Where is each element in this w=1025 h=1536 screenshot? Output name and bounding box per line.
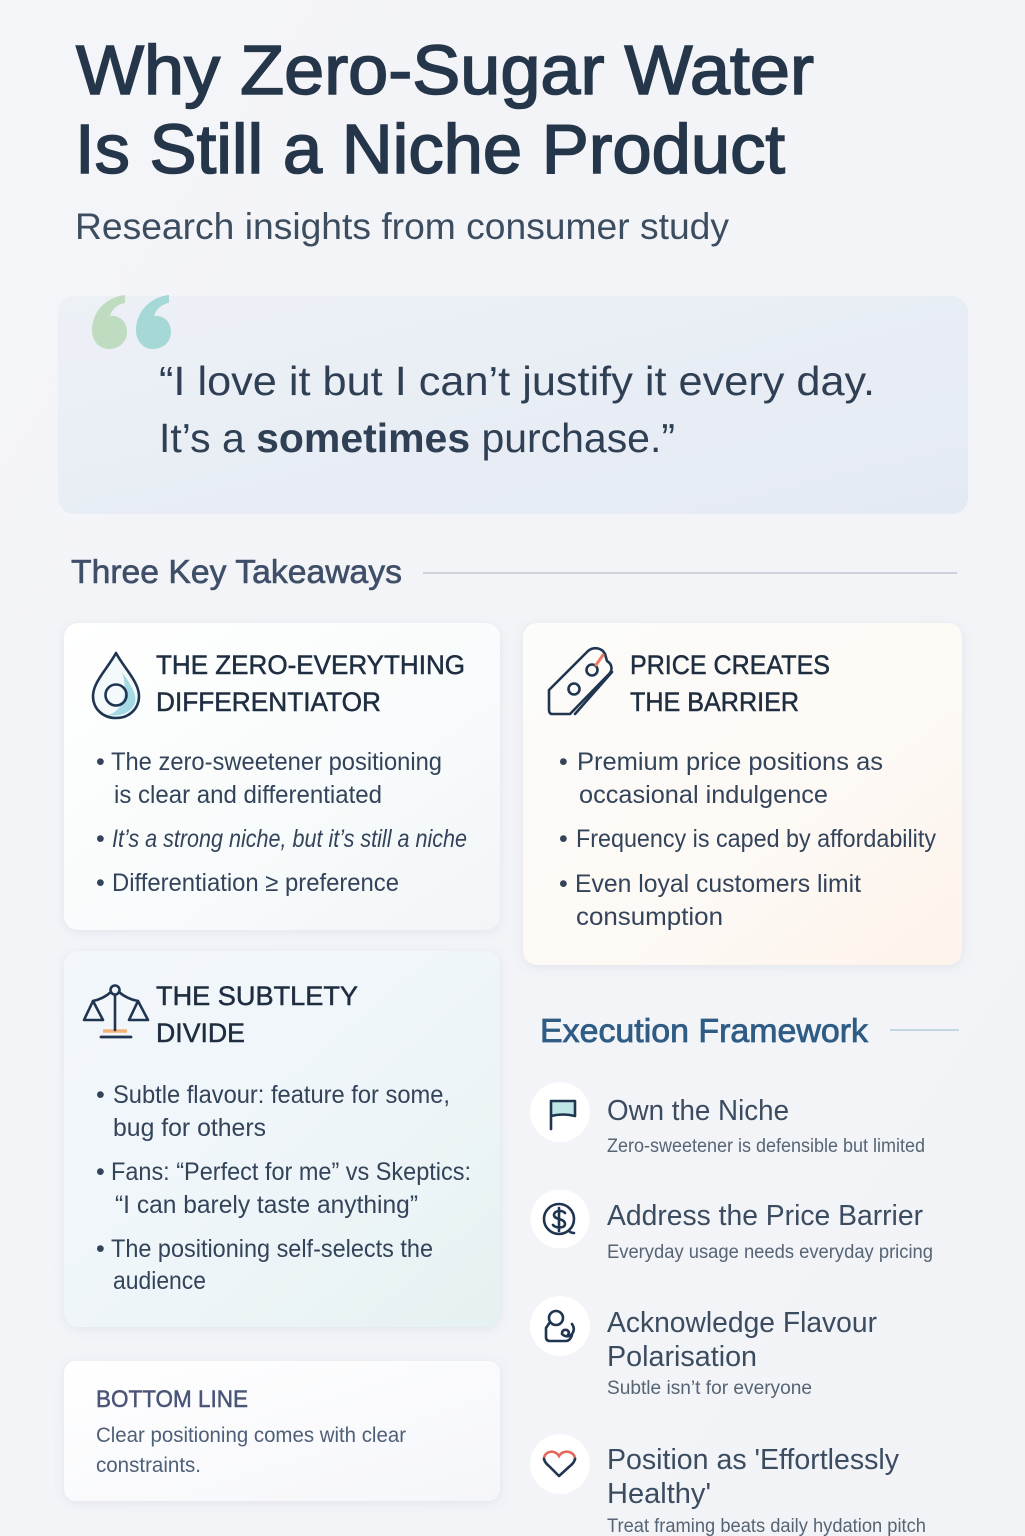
item title: Healthy': [607, 1478, 711, 1510]
panel: zero-everything differentiator: [64, 623, 500, 930]
item: acknowledge flavour polarisation: [530, 1296, 877, 1399]
card heading: THE BARRIER: [630, 687, 799, 717]
panel: quote: [58, 295, 968, 514]
title: Why Zero-Sugar Water: [76, 31, 814, 109]
bullet list: [96, 748, 467, 897]
bullet list: •: [96, 869, 105, 897]
bullet list: The positioning self-selects the: [111, 1235, 433, 1263]
bullet list: Even loyal customers limit: [575, 870, 861, 898]
item title: Polarisation: [607, 1341, 757, 1373]
heading: three key takeaways: Three Key Takeaways: [71, 553, 402, 590]
bullet list: “I can barely taste anything”: [115, 1191, 418, 1219]
panel: price creates the barrier: [523, 623, 962, 965]
bottom line text: [96, 1424, 406, 1477]
bullet list: •: [559, 870, 568, 898]
item title: Own the Niche: [607, 1095, 789, 1127]
icon: heart: [544, 1452, 575, 1476]
bullet list: Fans: “Perfect for me” vs Skeptics:: [111, 1158, 471, 1186]
bottom line heading: BOTTOM LINE: [96, 1386, 248, 1413]
item title: Address the Price Barrier: [607, 1200, 923, 1232]
bottom line text: constraints.: [96, 1454, 201, 1477]
bullet list: [559, 748, 936, 931]
bullet list: •: [96, 1081, 105, 1109]
bullet list: occasional indulgence: [579, 781, 828, 809]
bullet list: •: [559, 825, 568, 853]
title: [75, 31, 814, 188]
subtitle: Research insights from consumer study: [75, 206, 730, 247]
icon: flag: [551, 1101, 575, 1129]
bullet list: •: [96, 825, 105, 853]
item title: Position as 'Effortlessly: [607, 1444, 899, 1476]
panel: bottom line: [64, 1361, 500, 1501]
item title: [607, 1444, 899, 1510]
bullet list: Subtle flavour: feature for some,: [113, 1081, 450, 1109]
card heading: PRICE CREATES: [630, 650, 830, 680]
card heading: [156, 981, 358, 1048]
bullet list: Differentiation ≥ preference: [112, 869, 399, 897]
item: address the price barrier: [530, 1190, 933, 1263]
panel: subtlety divide: [64, 951, 500, 1327]
bottom line text: Clear positioning comes with clear: [96, 1424, 406, 1447]
card heading: THE ZERO-EVERYTHING: [156, 650, 465, 680]
bullet list: •: [559, 748, 568, 776]
bullet list: Premium price positions as: [577, 748, 883, 776]
bullet list: [96, 1081, 471, 1295]
item title: Acknowledge Flavour: [607, 1307, 877, 1339]
bullet list: •: [96, 1235, 105, 1263]
icon: dollar coin: [544, 1204, 574, 1234]
item description: Everyday usage needs everyday pricing: [607, 1242, 933, 1263]
item: own the niche: [530, 1082, 925, 1157]
quote text: [159, 358, 875, 461]
icon: quotation marks: [92, 295, 171, 349]
card heading: THE SUBTLETY: [156, 981, 358, 1011]
bullet list: consumption: [576, 903, 723, 931]
bullet list: audience: [113, 1267, 206, 1295]
quote text: “I love it but I can’t justify it every day.: [159, 358, 875, 404]
bullet list: •: [96, 748, 105, 776]
item description: Zero-sweetener is defensible but limited: [607, 1136, 925, 1157]
bullet list: It’s a strong niche, but it’s still a niche: [112, 825, 467, 853]
card heading: DIVIDE: [156, 1018, 245, 1048]
card heading: DIFFERENTIATOR: [156, 687, 381, 717]
title: Is Still a Niche Product: [75, 110, 785, 188]
card heading: [156, 650, 465, 717]
bullet list: •: [96, 1158, 105, 1186]
bullet list: is clear and differentiated: [114, 781, 382, 809]
icon: price tag: [549, 648, 612, 714]
bullet list: The zero-sweetener positioning: [111, 748, 442, 776]
bullet list: Frequency is caped by affordability: [576, 825, 936, 853]
item description: Subtle isn’t for everyone: [607, 1378, 812, 1399]
item: position as effortlessly healthy: [530, 1434, 926, 1536]
icon: person with swirl: [546, 1311, 574, 1341]
card heading: [630, 650, 830, 717]
icon: balance scales: [84, 986, 148, 1037]
quote text: It’s a sometimes purchase.”: [159, 415, 675, 461]
item title: [607, 1307, 877, 1373]
bullet list: bug for others: [113, 1114, 266, 1142]
icon: water drop: [93, 653, 139, 718]
heading: execution framework: Execution Framework: [540, 1012, 869, 1049]
